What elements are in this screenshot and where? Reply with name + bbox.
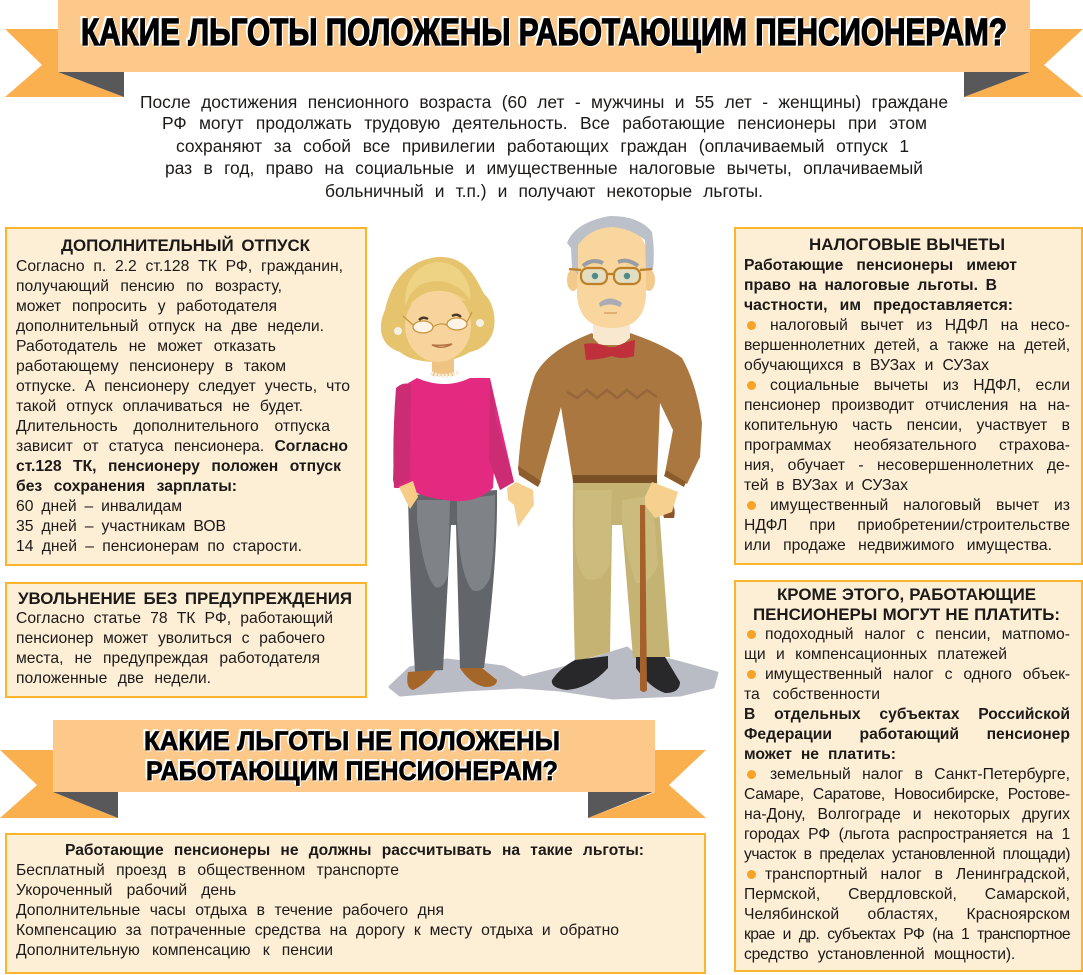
head <box>577 227 646 328</box>
text block: пенсионер производит отчисления на на- <box>744 397 1070 414</box>
text block: налоговый вычет из НДФЛ на несо- <box>770 317 1070 334</box>
text block: В отдельных субъектах Российской <box>744 706 1070 723</box>
text block: 60 дней – инвалидам <box>16 498 182 515</box>
face <box>405 290 471 362</box>
text block: Работодатель не может отказать <box>16 338 276 355</box>
mouth <box>432 344 452 347</box>
text block: обучающихся в ВУЗах и СУЗах <box>744 357 989 374</box>
text block: НДФЛ при приобретении/строительстве <box>744 517 1070 534</box>
heading: НАЛОГОВЫЕ ВЫЧЕТЫ <box>809 235 1005 254</box>
text block: крае и др. субъектах РФ (на 1 транспортное <box>744 926 1070 943</box>
text block: зависит от статуса пенсионера. Согласно <box>16 438 348 455</box>
earrings <box>394 327 402 335</box>
text block: на-Дону, Волгограде и некоторых других <box>744 806 1070 823</box>
intro text <box>140 92 948 201</box>
sweater zigzag <box>567 390 657 398</box>
icon: bullet <box>747 321 756 330</box>
collar and neck <box>593 320 630 345</box>
mouth <box>604 312 617 314</box>
icon: bullet <box>747 870 756 879</box>
belt <box>573 475 657 483</box>
text block: имущественный налоговый вычет из <box>770 497 1070 514</box>
panel: benefits not granted <box>5 833 706 974</box>
text block: частности, им предоставляется: <box>744 297 1013 314</box>
text block: положенные две недели. <box>16 670 211 687</box>
text block: Федерации работающий пенсионер <box>744 726 1070 743</box>
text block: социальные вычеты из НДФЛ, если <box>770 377 1070 394</box>
woman shoes <box>407 668 497 690</box>
heading: ДОПОЛНИТЕЛЬНЫЙ ОТПУСК <box>61 236 310 255</box>
text block: тей в ВУЗах и СУЗах <box>744 477 908 494</box>
intro text: раз в год, право на социальные и имущественные налоговые вычеты, оплачиваемый <box>165 158 923 178</box>
text block: работающему пенсионеру в таком <box>16 358 286 375</box>
man shoes <box>552 656 680 693</box>
text block: Согласно статье 78 ТК РФ, работающий <box>16 610 333 627</box>
text block: та собственности <box>744 686 880 703</box>
text block: Длительность дополнительного отпуска <box>16 418 330 435</box>
intro text: больничный и т.п.) и получают некоторые льготы. <box>325 181 763 201</box>
heading: ПЕНСИОНЕРЫ МОГУТ НЕ ПЛАТИТЬ: <box>753 605 1060 624</box>
intro text: РФ могут продолжать трудовую деятельность. Все работающие пенсионеры при этом <box>162 113 927 133</box>
text block <box>16 258 350 555</box>
cane <box>640 505 647 692</box>
text block: право на налоговые льготы. В <box>744 277 997 294</box>
ears <box>567 269 579 291</box>
glasses <box>569 268 652 284</box>
icon: bullet <box>747 670 756 679</box>
illustration: elderly couple <box>381 216 717 698</box>
eyebrows <box>583 261 638 266</box>
text block: Работающие пенсионеры имеют <box>744 257 1017 274</box>
woman <box>381 257 534 690</box>
text block: земельный налог в Санкт-Петербурге, <box>770 766 1070 783</box>
necklace <box>431 372 459 376</box>
text block: может попросить у работодателя <box>16 298 277 315</box>
text block: получающий пенсию по возрасту, <box>16 278 282 295</box>
text block: 35 дней – участникам ВОВ <box>16 518 226 535</box>
text block: Укороченный рабочий день <box>16 882 236 899</box>
text block: Самаре, Саратове, Новосибирске, Ростове- <box>744 786 1070 803</box>
text block: Бесплатный проезд в общественном транспорте <box>16 862 399 879</box>
text block <box>16 610 333 687</box>
text block: Челябинской областях, Красноярском <box>744 906 1070 923</box>
panel: dismissal without notice <box>5 582 367 698</box>
hands <box>399 481 418 509</box>
text block <box>744 257 1070 554</box>
text block: транспортный налог в Ленинградской, <box>765 866 1070 883</box>
heading: КРОМЕ ЭТОГО, РАБОТАЮЩИЕ <box>777 585 1036 604</box>
text block: щи и компенсационных платежей <box>744 646 1007 663</box>
text block: Пермской, Свердловской, Самарской, <box>744 886 1070 903</box>
text block: ст.128 ТК, пенсионеру положен отпуск <box>16 458 341 475</box>
text block <box>16 862 619 959</box>
text block: 14 дней – пенсионерам по старости. <box>16 538 302 555</box>
text block: Согласно п. 2.2 ст.128 ТК РФ, гражданин, <box>16 258 343 275</box>
heading: УВОЛЬНЕНИЕ БЕЗ ПРЕДУПРЕЖДЕНИЯ <box>18 589 352 608</box>
text block: вершеннолетних детей, а также на детей, <box>744 337 1070 354</box>
man trousers <box>573 480 670 662</box>
bow tie <box>584 340 635 360</box>
text block: средство установленной мощности). <box>744 946 1015 963</box>
hand <box>645 482 678 518</box>
intro text: сохраняют за собой все привилегии работающих граждан (оплачиваемый отпуск 1 <box>176 136 909 156</box>
text block: ния, обучает - несовершеннолетних де- <box>744 457 1070 474</box>
text block: пенсионер может уволиться с рабочего <box>16 630 325 647</box>
text block: копительную часть пенсии, участвует в <box>744 417 1070 434</box>
man <box>518 216 702 693</box>
neck <box>432 350 454 376</box>
intro text: После достижения пенсионного возраста (60 лет - мужчины и 55 лет - женщины) граждане <box>140 92 948 112</box>
ground shadow <box>390 648 717 698</box>
panel: tax deductions <box>734 227 1083 565</box>
icon: bullet <box>747 381 756 390</box>
text block: или продаже недвижимого имущества. <box>744 537 1052 554</box>
woman trousers <box>408 490 497 672</box>
icon: bullet <box>747 630 756 639</box>
text block: такой отпуск оплачиваться не будет. <box>16 398 303 415</box>
text block: может не платить: <box>744 746 896 763</box>
text block: Дополнительную компенсацию к пенсии <box>16 942 333 959</box>
panel: additional leave <box>5 227 367 566</box>
second ribbon banner: КАКИЕ ЛЬГОТЫ НЕ ПОЛОЖЕНЫ <box>144 726 560 756</box>
text block: городах РФ (льгота распространяется на 1 <box>744 826 1070 843</box>
text block: Дополнительные часы отдыха в течение рабочего дня <box>16 902 444 919</box>
moustache <box>599 298 622 307</box>
heading: Работающие пенсионеры не должны рассчитывать на такие льготы: <box>65 842 644 859</box>
text block: дополнительный отпуск на две недели. <box>16 318 324 335</box>
second ribbon banner <box>0 720 706 818</box>
hair back <box>381 257 495 362</box>
text block: без сохранения зарплаты: <box>16 478 237 495</box>
text block: Компенсацию за потраченные средства на дорогу к месту отдыха и обратно <box>16 922 619 939</box>
hair <box>567 216 654 275</box>
panel: may not pay <box>734 580 1083 972</box>
glasses <box>403 312 472 333</box>
sweater sleeves and body <box>518 333 702 484</box>
text block: программах необязательного страхова- <box>744 437 1070 454</box>
top ribbon banner <box>5 0 1083 97</box>
text block: подоходный налог с пенсии, матпомо- <box>765 626 1070 643</box>
text block <box>744 626 1070 963</box>
second ribbon banner: РАБОТАЮЩИМ ПЕНСИОНЕРАМ? <box>146 756 558 786</box>
blouse <box>393 378 514 501</box>
text block: отпуске. А пенсионеру следует учесть, что <box>16 378 350 395</box>
text block: имущественный налог с одного объек- <box>765 666 1070 683</box>
icon: bullet <box>747 770 756 779</box>
text block: участок в пределах установленной площади) <box>744 846 1070 863</box>
text block: места, не предупреждая работодателя <box>16 650 320 667</box>
icon: bullet <box>747 501 756 510</box>
